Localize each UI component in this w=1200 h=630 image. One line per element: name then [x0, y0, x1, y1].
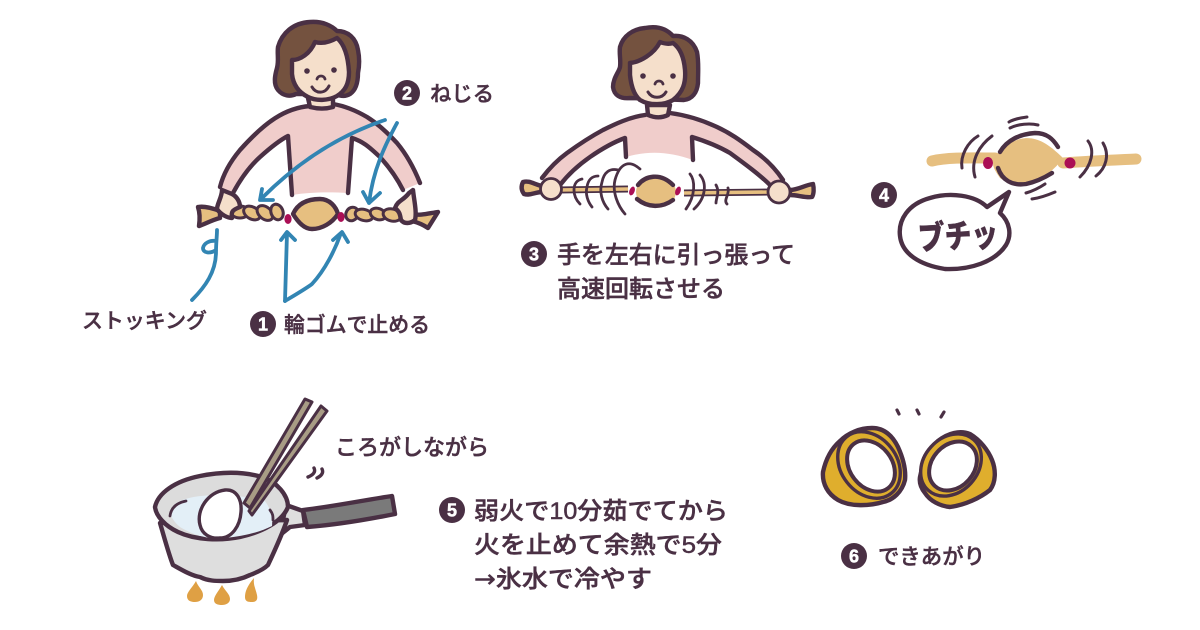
egg	[199, 490, 241, 538]
bubble text: ブチッ	[917, 216, 999, 257]
egg	[636, 176, 676, 208]
stocking twist right	[343, 205, 402, 223]
arrow: rubber band left	[281, 232, 295, 301]
text line 2: 火を止めて余熱で5分	[474, 532, 722, 559]
flames	[187, 578, 257, 605]
pot rim	[155, 473, 288, 539]
label: step 3: 3	[529, 244, 539, 264]
hair	[275, 22, 359, 96]
label: step 4 badge	[871, 182, 897, 208]
left ring	[823, 419, 913, 511]
woman body	[542, 113, 783, 185]
text line 3: →氷水で冷やす	[474, 565, 652, 593]
stocking tails	[198, 207, 220, 226]
pot handle grip	[303, 496, 395, 527]
step 6 illustration: finished egg halves	[823, 410, 995, 511]
label: step 5: 5	[447, 500, 457, 520]
egg in stocking	[293, 199, 338, 229]
rubber bands	[983, 157, 1076, 169]
tails	[522, 182, 542, 195]
hair	[613, 27, 698, 100]
sparkle ticks	[897, 410, 944, 417]
woman body	[220, 104, 420, 195]
face	[292, 38, 349, 100]
egg	[993, 138, 1063, 184]
arrow: twist left	[260, 120, 385, 200]
label: rolling: ころがしながら	[335, 435, 489, 460]
arrow: twist right	[363, 123, 397, 203]
pot handle neck	[280, 505, 305, 535]
label: stocking: ストッキング	[82, 310, 207, 333]
label: step 1 rubber band: 1	[258, 314, 268, 334]
label: step 6	[841, 543, 985, 569]
label: step 2 twist: 2	[402, 84, 412, 104]
text line 1: 手を左右に引っ張って	[557, 242, 795, 269]
rope left	[558, 189, 628, 190]
speech bubble	[900, 192, 1009, 269]
face	[630, 42, 685, 104]
step 5 illustration: pot with egg	[155, 399, 395, 605]
label: step 6: 6	[849, 546, 859, 566]
motion lines	[962, 117, 1107, 199]
label: step 1 rubber band: 輪ゴムで止める	[284, 313, 430, 337]
face features	[640, 73, 676, 97]
quote marks	[308, 468, 323, 478]
label: step 2 twist: ねじる	[430, 83, 494, 106]
stocking strips	[932, 158, 1136, 163]
label: step 3	[521, 241, 795, 303]
arrow: rubber band right	[285, 232, 348, 301]
stocking twist left	[231, 202, 285, 223]
motion lines	[574, 164, 728, 214]
rubber bands	[284, 212, 345, 224]
neck	[308, 98, 333, 108]
neck	[647, 105, 670, 117]
text line 2: 高速回転させる	[557, 276, 725, 303]
label: step 4 badge: 4	[879, 186, 889, 206]
step 3 illustration: spinning egg	[522, 27, 814, 214]
water	[170, 495, 272, 538]
step 4 illustration: stocking snaps	[900, 117, 1136, 269]
face features	[304, 67, 337, 92]
label: step 2 twist	[394, 80, 494, 106]
hands	[540, 178, 562, 200]
label: step 6: できあがり	[878, 545, 985, 569]
hands	[217, 190, 240, 218]
chopsticks	[244, 399, 327, 515]
text line 1: 弱火で10分茹でてから	[474, 498, 728, 525]
right ring	[908, 422, 995, 508]
rope right	[684, 192, 772, 193]
pot body	[160, 520, 287, 581]
step 1-2 illustration: woman twisting stocking	[192, 22, 438, 301]
rubber bands	[628, 186, 682, 196]
line: stocking pointer	[192, 230, 217, 300]
label: step 5	[439, 497, 728, 593]
